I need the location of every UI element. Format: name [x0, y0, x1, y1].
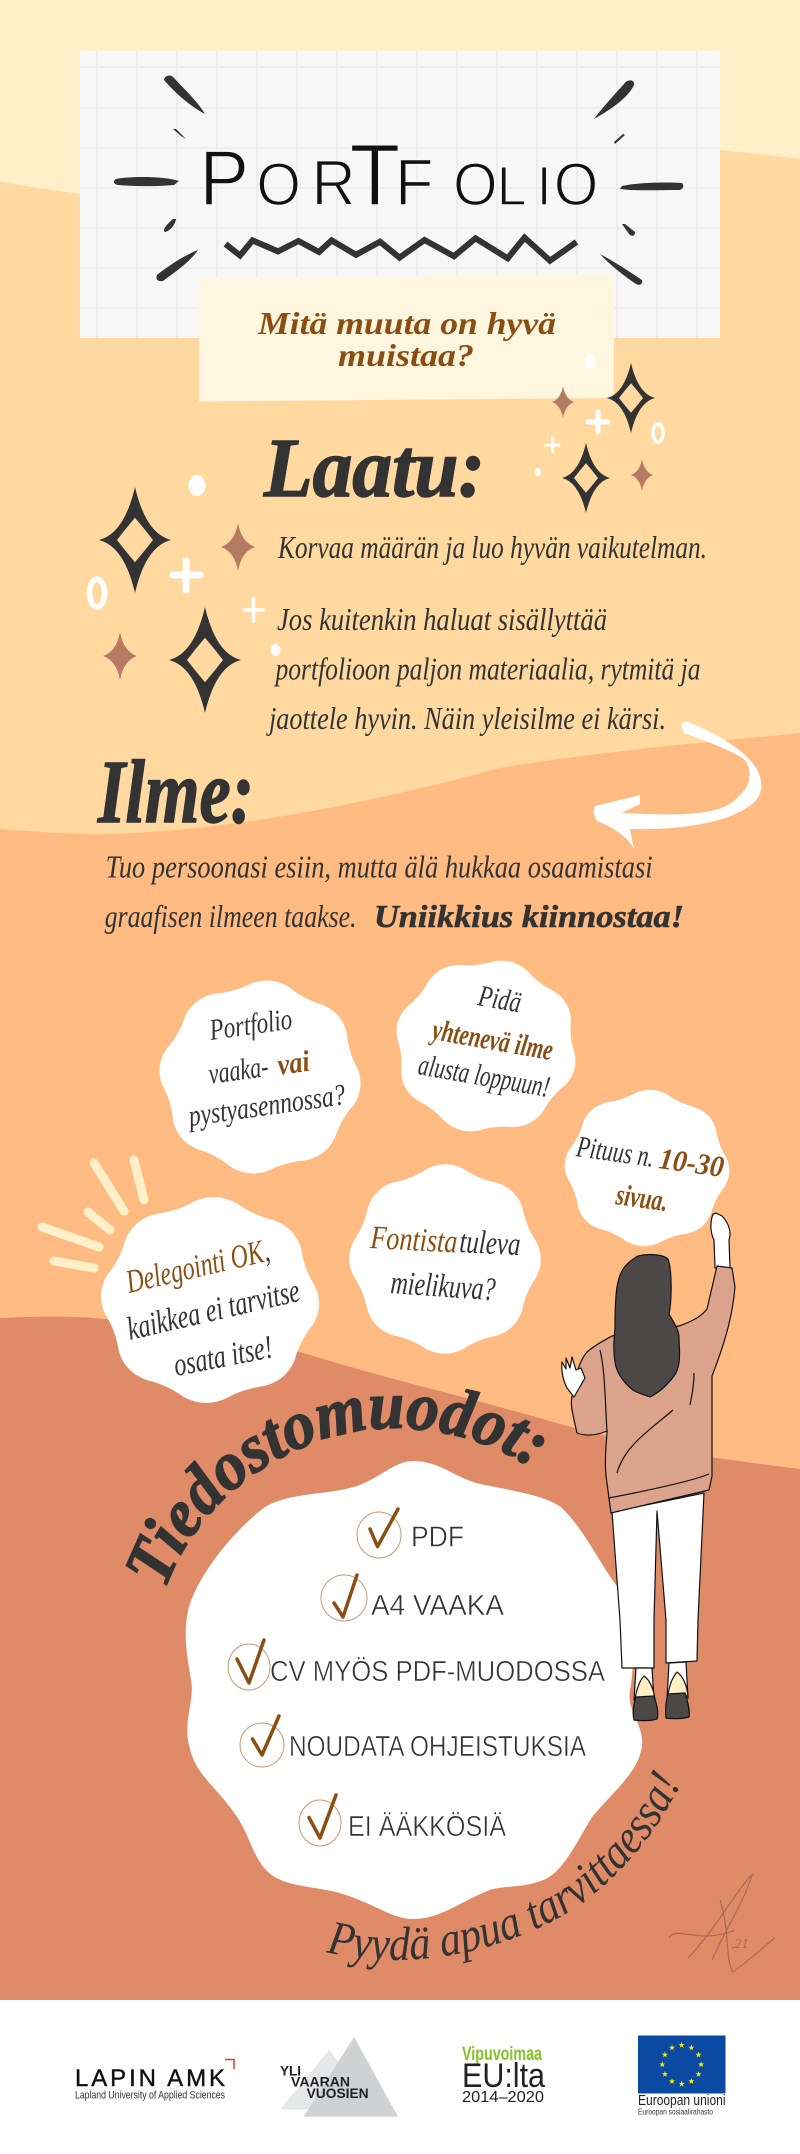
illustration: woman [562, 1213, 735, 1721]
text block: Ilme: graafisen ilmeen taakse. [105, 898, 357, 934]
bubble: font [334, 1149, 556, 1369]
text block: Ilme: Uniikkius kiinnostaa! [374, 898, 684, 934]
sparkles: left [90, 487, 280, 713]
bubble text: kaikkea ei tarvitse [124, 1273, 303, 1348]
logo: Vipuvoimaa EU:lta: EU:lta [462, 2057, 545, 2095]
bubble text: pystyasennossa? [185, 1078, 347, 1133]
bubble: consistent look [388, 952, 584, 1140]
logo: Lapin AMK: LAPIN AMK [75, 2065, 225, 2092]
item: no umlauts [299, 1795, 507, 1846]
title rays [114, 76, 683, 285]
logo: Vipuvoimaa EU:lta: 2014–2020 [462, 2089, 544, 2106]
text block: Laatu: jaottele hyvin. Näin yleisilme ei kärsi. [266, 700, 666, 736]
logo: Vipuvoimaa EU:lta: Vipuvoimaa [462, 2044, 542, 2065]
rays around delegation bubble [42, 1160, 144, 1268]
bubble text: vaaka- [206, 1050, 270, 1091]
heading: Tiedostomuodot: Tiedostomuodot: [125, 1388, 544, 1586]
title: T [350, 126, 400, 223]
title: O [554, 152, 598, 218]
title: L [497, 155, 526, 217]
item: CV [228, 1640, 606, 1690]
logo: EU flag: Euroopan unioni [638, 2092, 726, 2109]
text block: Laatu: Jos kuitenkin haluat sisällyttää [277, 601, 607, 637]
logo: EU flag: Euroopan sosiaalirahasto [638, 2108, 713, 2116]
title: R [312, 148, 356, 219]
bubble text: tuleva [459, 1224, 521, 1263]
bubble text [122, 1233, 303, 1384]
bubble text [574, 1130, 726, 1218]
logo: Lapin AMK: Lapland University of Applied Sciences [75, 2090, 225, 2102]
title: F [395, 146, 434, 219]
logo: Lapin AMK [75, 2060, 234, 2102]
logo: Yli vaaran vuosien: VAARAN [291, 2074, 350, 2090]
item: PDF: PDF [411, 1522, 464, 1554]
title: P [200, 135, 249, 222]
item: guidelines [240, 1716, 587, 1767]
text block: Laatu: portfolioon paljon materiaalia, rytmitä ja [274, 650, 700, 686]
logo: EU flag [638, 2036, 726, 2116]
item: no umlauts: EI ÄÄKKÖSIÄ [348, 1811, 507, 1843]
item: CV: CV MYÖS PDF-MUODOSSA [270, 1656, 606, 1688]
logo: Yli vaaran vuosien: VUOSIEN [307, 2085, 369, 2101]
bubble: delegation [88, 1185, 332, 1415]
logo: Yli vaaran vuosien: YLI [280, 2063, 301, 2079]
arrow [594, 722, 761, 849]
panel: grid paper [80, 51, 720, 338]
logo: Vipuvoimaa EU:lta [462, 2044, 545, 2106]
subtitle text: muistaa? [338, 337, 474, 373]
bubble text: alusta loppuun! [416, 1048, 552, 1104]
title: O [453, 152, 497, 218]
bubble text [369, 1220, 521, 1308]
title zigzag [226, 238, 576, 261]
subtitle text: Mitä muuta on hyvä [257, 305, 556, 341]
item: A4: A4 VAAKA [371, 1590, 505, 1622]
title: O [257, 152, 301, 218]
panel: file formats blob [186, 1461, 642, 1919]
logo: Yli vaaran vuosien [280, 2037, 398, 2117]
bubble text: osata itse! [171, 1329, 276, 1384]
signature [669, 1875, 775, 1972]
heading: Laatu: Laatu: [263, 422, 485, 515]
bubble text [185, 1003, 347, 1133]
bubble text: Portfolio [207, 1003, 294, 1047]
bubble text: Fontista [369, 1220, 458, 1261]
bubble: length [555, 1081, 739, 1255]
bubble text: Delegointi OK, [122, 1233, 273, 1301]
item: guidelines: NOUDATA OHJEISTUKSIA [289, 1731, 587, 1763]
text block: Ilme: Tuo persoonasi esiin, mutta älä hukkaa osaamistasi [106, 848, 653, 884]
bubble text: Pituus n. [574, 1130, 656, 1174]
item: A4 [321, 1575, 505, 1622]
bubble text: sivua. [613, 1178, 670, 1218]
heading: Ilme: Ilme: [97, 743, 254, 842]
sparkles: top right [188, 355, 663, 513]
signature: ,21 [731, 1937, 748, 1952]
checklist [228, 1509, 606, 1846]
title: I [537, 155, 552, 217]
bubble text [416, 979, 556, 1104]
bubble text: vai [275, 1045, 312, 1082]
bubble text: mielikuva? [389, 1265, 497, 1308]
caption: ask for help: Pyydä apua tarvittaessa! [326, 1769, 678, 1970]
bubble text: 10-30 [657, 1142, 726, 1184]
bubble text: Pidä [475, 979, 524, 1019]
subtitle panel [199, 274, 614, 402]
bubble: orientation [152, 973, 368, 1181]
item: PDF [357, 1509, 464, 1558]
bubble text: yhtenevä ilme [428, 1013, 556, 1067]
